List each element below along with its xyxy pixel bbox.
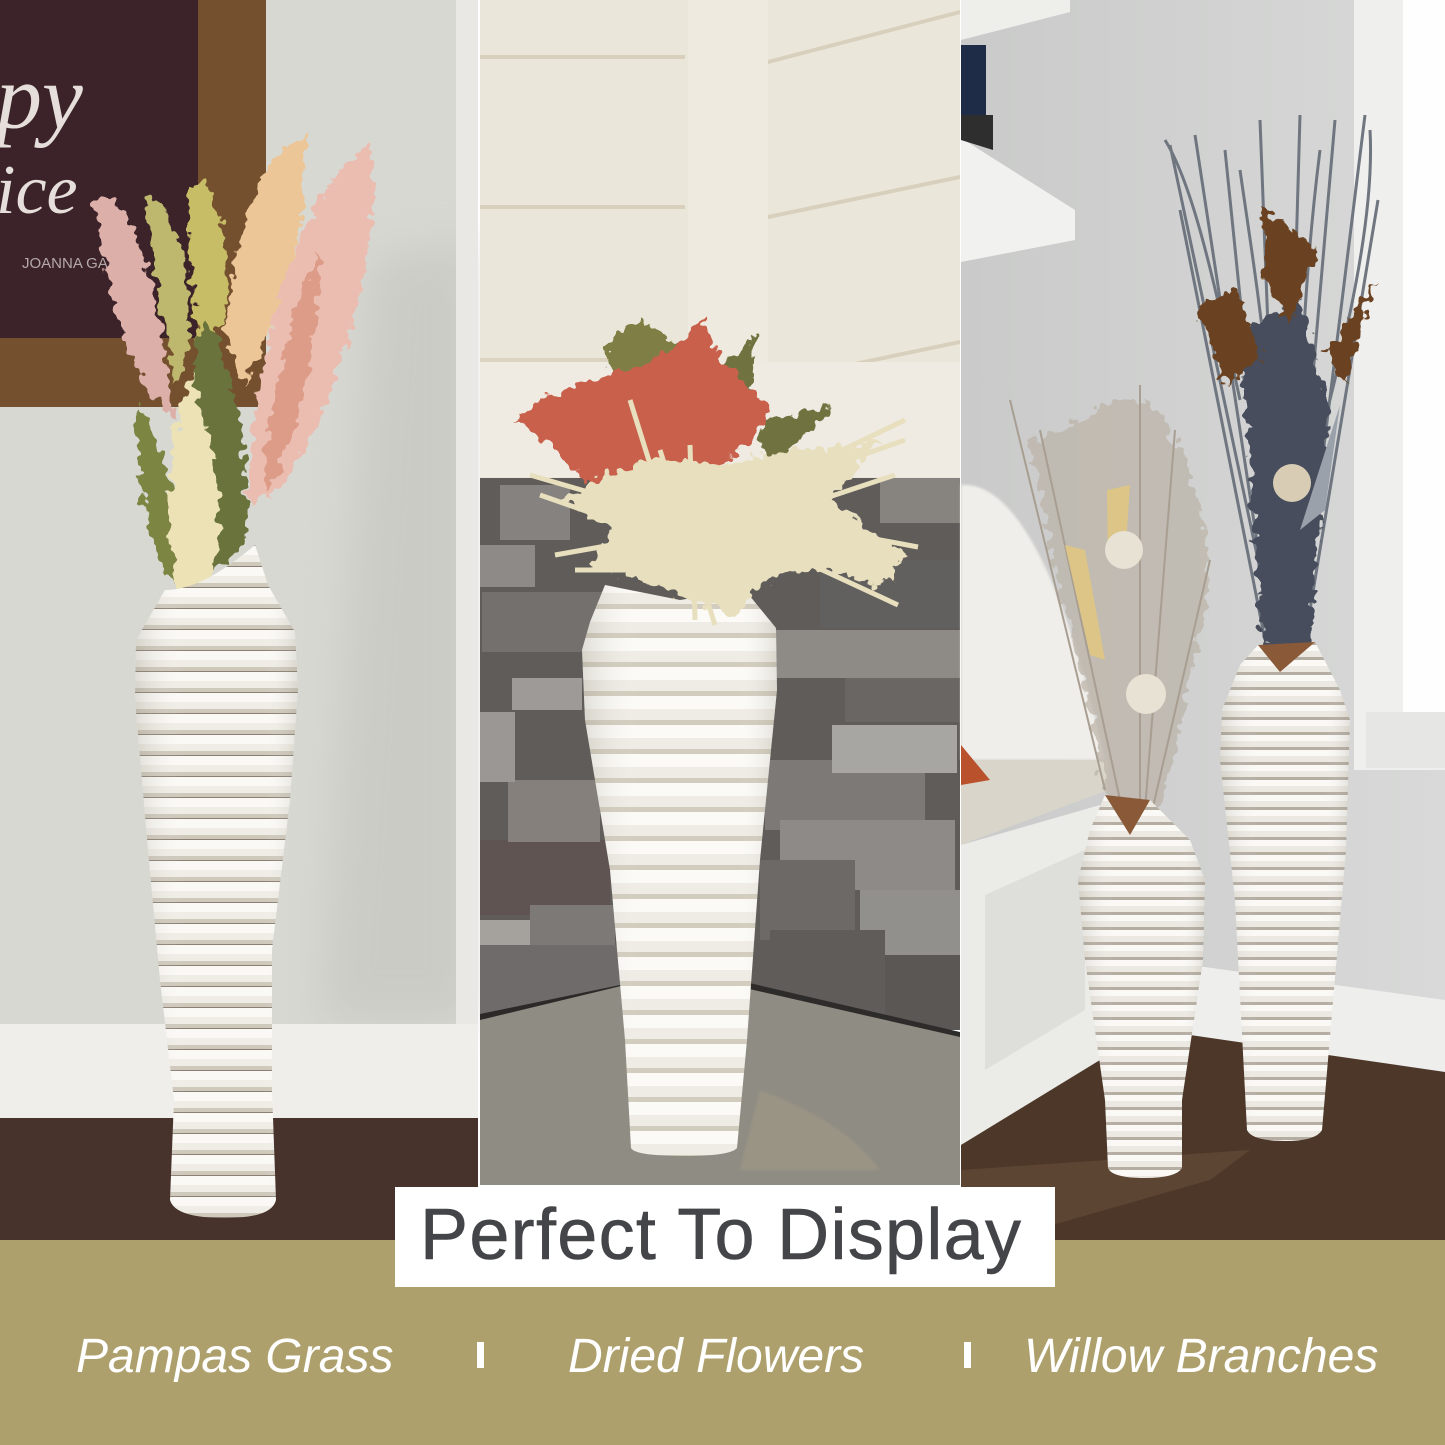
bottom olive band	[0, 1240, 1445, 1445]
heading background box	[395, 1187, 1055, 1287]
vase tall	[1220, 642, 1350, 1141]
right scene: willow branches vases	[961, 0, 1445, 1240]
willow arrangement tall vase	[1165, 115, 1378, 645]
middle scene: dried flowers vase	[480, 0, 960, 1185]
dried arrangement short vase	[1010, 385, 1210, 835]
left scene: pampas grass vase	[0, 0, 478, 1240]
label: willow branches: Willow Branches	[1024, 1330, 1378, 1383]
left scene: pampas grass vase: JOANNA GAINES	[22, 255, 143, 272]
vase middle	[582, 585, 777, 1156]
heading: Perfect To Display	[420, 1195, 1022, 1275]
vase short	[1078, 795, 1205, 1178]
label: dried flowers: Dried Flowers	[568, 1330, 864, 1383]
label: pampas grass: Pampas Grass	[76, 1330, 393, 1383]
separator two	[964, 1342, 971, 1368]
separator one	[477, 1342, 484, 1368]
pampas plumes	[96, 138, 373, 590]
vase left	[135, 545, 298, 1218]
dried flower bouquet	[515, 318, 918, 625]
